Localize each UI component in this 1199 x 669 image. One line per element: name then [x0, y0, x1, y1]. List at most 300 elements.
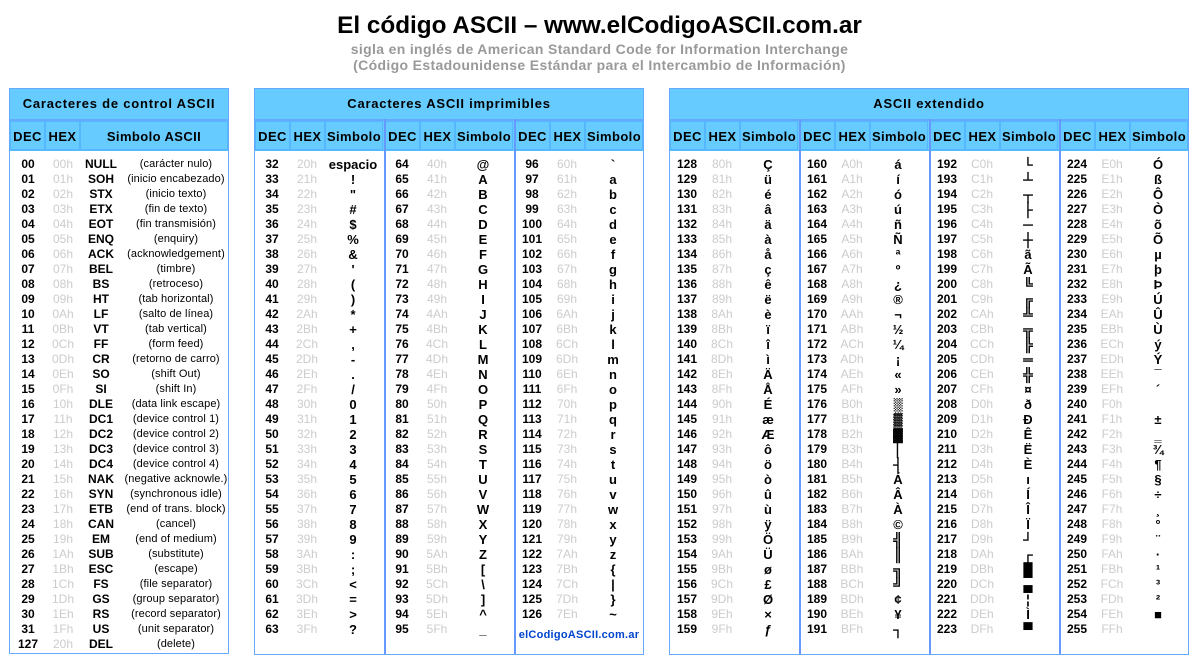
symbols: ▄ [1023, 577, 1033, 592]
symbols: ╔ [1023, 292, 1033, 307]
decimal codes: 243 [1067, 442, 1087, 456]
decimal codes: 32 [265, 157, 279, 171]
decimal codes: 178 [807, 427, 827, 441]
panel heading: control characters: Caracteres de control ASCII [23, 96, 215, 111]
column: control descriptions: (end of trans. block) [126, 503, 226, 515]
symbols: ß [1154, 172, 1162, 187]
hex codes: A4h [841, 217, 863, 231]
symbols: ═ [1023, 352, 1033, 367]
decimal codes: 111 [523, 382, 541, 396]
symbols: j [611, 307, 615, 322]
decimal codes: 162 [807, 187, 827, 201]
symbols: █ [1023, 562, 1033, 577]
symbols: ë [764, 292, 772, 307]
decimal codes: 150 [677, 487, 697, 501]
decimal codes: 191 [807, 622, 827, 636]
decimal codes: 203 [937, 322, 957, 336]
column: hex codes: 0Eh [52, 367, 74, 381]
symbols: æ [762, 412, 774, 427]
column: hex codes: 1Bh [52, 562, 74, 576]
decimal codes: 125 [522, 592, 542, 606]
symbols: î [766, 337, 770, 352]
decimal codes [395, 157, 409, 636]
hex codes: 72h [557, 427, 577, 441]
decimal codes: 187 [807, 562, 827, 576]
hex codes: 5Ah [426, 547, 448, 561]
hex codes: E3h [1101, 202, 1123, 216]
symbols: ┌ [1023, 547, 1033, 562]
hex codes: A6h [841, 247, 863, 261]
hex codes: 78h [557, 517, 577, 531]
symbols: ó [894, 187, 902, 202]
header: HEX [705, 121, 740, 150]
hex codes: DFh [971, 622, 993, 636]
hex codes: 5Ch [426, 577, 448, 591]
decimal codes: 226 [1067, 187, 1087, 201]
hex codes: 9Ah [711, 547, 733, 561]
symbols: ^ [479, 607, 487, 622]
column: control descriptions: (salto de línea) [139, 308, 213, 320]
decimal codes: 43 [265, 322, 279, 336]
decimal codes: 104 [522, 277, 542, 291]
decimal codes: 189 [807, 592, 827, 606]
column: control symbols: SOH [88, 172, 114, 186]
decimal codes: 137 [677, 292, 697, 306]
hex codes: 40h [427, 157, 447, 171]
symbols: ø [764, 562, 772, 577]
symbols: ¡ [896, 352, 900, 367]
hex codes: 50h [427, 397, 447, 411]
symbols: N [478, 367, 488, 382]
decimal codes: 149 [677, 472, 697, 486]
symbols: a [609, 172, 617, 187]
column: control symbols: EM [92, 532, 110, 546]
symbols: % [347, 232, 359, 247]
decimal codes: 134 [677, 247, 697, 261]
header: Simbolo [585, 121, 643, 150]
symbols: D [478, 217, 488, 232]
header: HEX [550, 121, 585, 150]
header: DEC [10, 121, 45, 150]
decimal codes: 145 [677, 412, 697, 426]
column: decimal codes: 18 [21, 427, 35, 441]
symbols: © [893, 517, 903, 532]
column: control descriptions: (negative acknowle.) [125, 473, 227, 485]
column: hex codes: 1Ch [52, 577, 74, 591]
hex codes: 86h [712, 247, 732, 261]
decimal codes: 129 [677, 172, 697, 186]
hex codes: 5Eh [426, 607, 448, 621]
hex codes [296, 157, 318, 636]
hex codes: 22h [297, 187, 317, 201]
symbols: o [609, 382, 617, 397]
hex codes: D1h [971, 412, 993, 426]
hex codes: E7h [1101, 262, 1123, 276]
hex codes: 28h [297, 277, 317, 291]
hex codes: 41h [427, 172, 447, 186]
symbols: ? [349, 622, 357, 637]
column: decimal codes: 04 [21, 217, 35, 231]
symbols: ` [611, 157, 615, 172]
table 160-191 [807, 157, 904, 638]
decimal codes: 156 [677, 577, 697, 591]
column: control descriptions: (escape) [154, 563, 198, 575]
decimal codes: 202 [937, 307, 957, 321]
hex codes: 46h [427, 247, 447, 261]
symbols: à [764, 232, 772, 247]
hex codes: 20h [297, 157, 317, 171]
column: hex codes: 19h [53, 532, 73, 546]
column: control symbols: ESC [89, 562, 113, 576]
decimal codes: 182 [807, 487, 827, 501]
decimal codes: 148 [677, 457, 697, 471]
hex codes [556, 157, 578, 621]
symbols: ÿ [764, 517, 772, 532]
symbols: B [478, 187, 488, 202]
column: control descriptions: (shift Out) [151, 368, 201, 380]
hex codes: 27h [297, 262, 317, 276]
header: Simbolo [870, 121, 928, 150]
symbols: ┐ [893, 622, 903, 637]
hex codes: 92h [712, 427, 732, 441]
column: hex codes: 06h [53, 247, 73, 261]
symbols: ª [896, 247, 900, 262]
hex codes: A2h [841, 187, 863, 201]
decimal codes: 215 [937, 502, 957, 516]
symbols: V [479, 487, 487, 502]
decimal codes: 221 [937, 592, 957, 606]
symbols: $ [349, 217, 357, 232]
symbols: ¼ [893, 337, 903, 352]
hex codes: A7h [841, 262, 863, 276]
decimal codes: 90 [395, 547, 409, 561]
symbols: / [351, 382, 355, 397]
hex codes: CCh [970, 337, 994, 351]
column: control descriptions: (device control 4) [133, 458, 219, 470]
decimal codes [677, 157, 697, 636]
hex codes: 9Bh [711, 562, 733, 576]
decimal codes: 92 [395, 577, 409, 591]
hex codes: EAh [1101, 307, 1123, 321]
decimal codes: 209 [937, 412, 957, 426]
table 32-63 [265, 157, 377, 637]
symbols: Y [479, 532, 487, 547]
hex codes: 6Bh [556, 322, 578, 336]
column: control symbols: GS [92, 592, 110, 606]
hex codes: E5h [1101, 232, 1123, 246]
column: control descriptions: (fin de texto) [145, 203, 207, 215]
hex codes: 6Dh [556, 352, 578, 366]
panel heading: printable characters [255, 89, 643, 119]
symbols: C [478, 202, 488, 217]
column: hex codes: 03h [53, 202, 73, 216]
decimal codes: 172 [807, 337, 827, 351]
hex codes: 3Bh [296, 562, 318, 576]
decimal codes: 102 [522, 247, 542, 261]
hex codes: CBh [970, 322, 994, 336]
column: hex codes [52, 157, 74, 651]
decimal codes: 225 [1067, 172, 1087, 186]
hex codes: C4h [971, 217, 993, 231]
decimal codes: 151 [677, 502, 697, 516]
header: HEX: HEX [1099, 129, 1126, 144]
column: hex codes: 0Ah [52, 307, 74, 321]
header: HEX: HEX [424, 129, 451, 144]
hex codes: F8h [1102, 517, 1122, 531]
symbols: þ [1154, 262, 1162, 277]
hex codes: 2Ch [296, 337, 318, 351]
symbols: } [610, 592, 616, 607]
symbols: O [478, 382, 488, 397]
hex codes: 3Dh [296, 592, 318, 606]
panel heading: extended ASCII: ASCII extendido [873, 96, 985, 111]
hex codes: 57h [427, 502, 447, 516]
symbols: E [479, 232, 487, 247]
hex codes: E6h [1101, 247, 1123, 261]
decimal codes: 38 [265, 247, 279, 261]
decimal codes: 133 [677, 232, 697, 246]
symbols: Ö [763, 532, 773, 547]
hex codes: 43h [427, 202, 447, 216]
symbols: ò [764, 472, 772, 487]
symbols: ² [1156, 592, 1160, 607]
decimal codes: 61 [265, 592, 279, 606]
subtitle line 2: (Código Estadounidense Estándar para el Intercambio de Información) [353, 57, 846, 73]
symbols: ¤ [1024, 382, 1032, 397]
header: DEC [385, 121, 420, 150]
symbols: Õ [1153, 232, 1163, 247]
column: hex codes: 1Ah [52, 547, 74, 561]
hex codes: 4Ah [426, 307, 448, 321]
hex codes: 53h [427, 442, 447, 456]
hex codes: A5h [841, 232, 863, 246]
header: DEC: DEC [933, 129, 962, 144]
symbols: g [609, 262, 617, 277]
hex codes: FBh [1101, 562, 1123, 576]
hex codes: E8h [1101, 277, 1123, 291]
symbols: Ì [1026, 607, 1030, 622]
symbols: » [894, 382, 902, 397]
hex codes: 70h [557, 397, 577, 411]
decimal codes: 123 [522, 562, 542, 576]
header: HEX: HEX [709, 129, 736, 144]
column: decimal codes: 19 [21, 442, 35, 456]
hex codes: AFh [841, 382, 863, 396]
decimal codes: 121 [522, 532, 542, 546]
decimal codes: 186 [807, 547, 827, 561]
decimal codes: 195 [937, 202, 957, 216]
symbols: t [611, 457, 615, 472]
header: Simbolo: Simbolo [327, 129, 381, 144]
column: hex codes: 10h [53, 397, 73, 411]
symbols: P [479, 397, 487, 412]
hex codes: 26h [297, 247, 317, 261]
decimal codes: 63 [265, 622, 279, 636]
decimal codes: 82 [395, 427, 409, 441]
symbols: Â [893, 487, 903, 502]
hex codes: ABh [841, 322, 863, 336]
hex codes: 34h [297, 457, 317, 471]
symbols: 2 [349, 427, 357, 442]
symbols [607, 157, 619, 622]
column: control symbols: ENQ [88, 232, 114, 246]
symbols: Ê [1024, 427, 1032, 442]
column: control descriptions: (tab vertical) [145, 323, 207, 335]
decimal codes: 171 [807, 322, 827, 336]
column: decimal codes: 14 [21, 367, 35, 381]
symbols: └ [1023, 157, 1033, 172]
column: control descriptions: (device control 3) [133, 443, 219, 455]
hex codes: 83h [712, 202, 732, 216]
hex codes: 62h [557, 187, 577, 201]
hex codes [970, 157, 994, 636]
hex codes: 42h [427, 187, 447, 201]
symbols: µ [1154, 247, 1162, 262]
hex codes: 75h [557, 472, 577, 486]
hex codes: 7Ch [556, 577, 578, 591]
symbols: ┴ [1023, 172, 1033, 187]
hex codes: D3h [971, 442, 993, 456]
column: decimal codes: 13 [21, 352, 35, 366]
decimal codes: 47 [265, 382, 279, 396]
hex codes: ECh [1100, 337, 1124, 351]
symbols: ¹ [1156, 562, 1160, 577]
decimal codes: 106 [522, 307, 542, 321]
decimal codes: 217 [937, 532, 957, 546]
symbols: ¶ [1154, 457, 1162, 472]
decimal codes: 185 [807, 532, 827, 546]
hex codes: 96h [712, 487, 732, 501]
hex codes: 87h [712, 262, 732, 276]
column: hex codes: 11h [53, 412, 73, 426]
decimal codes: 116 [522, 457, 542, 471]
decimal codes: 97 [525, 172, 539, 186]
hex codes: BDh [840, 592, 864, 606]
header: Simbolo [740, 121, 798, 150]
column: hex codes: 01h [53, 172, 73, 186]
decimal codes: 235 [1067, 322, 1087, 336]
column: control descriptions: (unit separator) [138, 623, 214, 635]
decimal codes: 166 [807, 247, 827, 261]
header: Simbolo: Simbolo [1132, 129, 1186, 144]
column: hex codes: 00h [53, 157, 73, 171]
hex codes: 24h [297, 217, 317, 231]
column: control descriptions: (inicio texto) [146, 188, 206, 200]
column: control descriptions: (carácter nulo) [140, 158, 212, 170]
hex codes: 7Eh [556, 607, 578, 621]
decimal codes: 230 [1067, 247, 1087, 261]
decimal codes: 45 [265, 352, 279, 366]
hex codes: 2Bh [296, 322, 318, 336]
header: HEX: HEX [554, 129, 581, 144]
hex codes: BBh [841, 562, 863, 576]
hex codes: 30h [297, 397, 317, 411]
decimal codes: 70 [395, 247, 409, 261]
symbols: ç [764, 262, 772, 277]
symbols: é [764, 187, 772, 202]
column: control descriptions: (retorno de carro) [132, 353, 220, 365]
header: Simbolo: Simbolo [872, 129, 926, 144]
header: DEC: DEC [673, 129, 702, 144]
hex codes: 45h [427, 232, 447, 246]
symbols: ╗ [893, 562, 903, 577]
table 64-95 [395, 157, 490, 637]
symbols: ┬ [1023, 187, 1033, 202]
header: HEX [290, 121, 325, 150]
symbols: ╝ [893, 577, 903, 592]
hex codes: F0h [1102, 397, 1122, 411]
symbols: M [478, 352, 488, 367]
hex codes: FAh [1101, 547, 1123, 561]
symbols: ' [351, 262, 355, 277]
symbols: ╚ [1023, 277, 1033, 292]
symbols: â [764, 202, 772, 217]
hex codes: 8Bh [711, 322, 733, 336]
column: decimal codes: 16 [21, 397, 35, 411]
column: decimal codes: 21 [21, 472, 35, 486]
decimal codes: 77 [395, 352, 409, 366]
decimal codes: 159 [677, 622, 697, 636]
decimal codes: 114 [522, 427, 542, 441]
decimal codes: 208 [937, 397, 957, 411]
symbols: x [609, 517, 617, 532]
decimal codes: 234 [1067, 307, 1087, 321]
decimal codes: 117 [522, 472, 542, 486]
hex codes: 91h [712, 412, 732, 426]
decimal codes: 39 [265, 262, 279, 276]
header: DEC: DEC [258, 129, 287, 144]
hex codes: 8Ch [711, 337, 733, 351]
decimal codes: 135 [677, 262, 697, 276]
symbols: ÷ [1154, 487, 1162, 502]
header: HEX [835, 121, 870, 150]
symbols: v [609, 487, 617, 502]
hex codes: C7h [971, 262, 993, 276]
decimal codes: 33 [265, 172, 279, 186]
decimal codes: 180 [807, 457, 827, 471]
hex codes: E4h [1101, 217, 1123, 231]
symbols: ║ [893, 547, 903, 562]
hex codes: 32h [297, 427, 317, 441]
decimal codes: 36 [265, 217, 279, 231]
decimal codes: 161 [807, 172, 827, 186]
decimal codes: 44 [265, 337, 279, 351]
hex codes: FCh [1101, 577, 1123, 591]
decimal codes: 51 [265, 442, 279, 456]
decimal codes: 101 [522, 232, 542, 246]
hex codes: CFh [971, 382, 993, 396]
decimal codes: 122 [522, 547, 542, 561]
column: decimal codes: 03 [21, 202, 35, 216]
column: control symbols: DLE [89, 397, 113, 411]
symbols: ─ [1023, 217, 1033, 232]
symbols: ├ [1023, 202, 1033, 217]
decimal codes: 56 [265, 517, 279, 531]
hex codes: 5Bh [426, 562, 448, 576]
decimal codes: 240 [1067, 397, 1087, 411]
symbols: ï [766, 322, 770, 337]
column: control symbols: DC2 [89, 427, 113, 441]
column: control symbols: NULL [85, 157, 117, 171]
hex codes: 8Dh [711, 352, 733, 366]
column header band [255, 119, 643, 151]
column: hex codes: 0Bh [52, 322, 74, 336]
hex codes: A0h [841, 157, 863, 171]
hex codes: FFh [1101, 622, 1123, 636]
hex codes: D0h [971, 397, 993, 411]
symbols: [ [481, 562, 485, 577]
hex codes: 21h [297, 172, 317, 186]
